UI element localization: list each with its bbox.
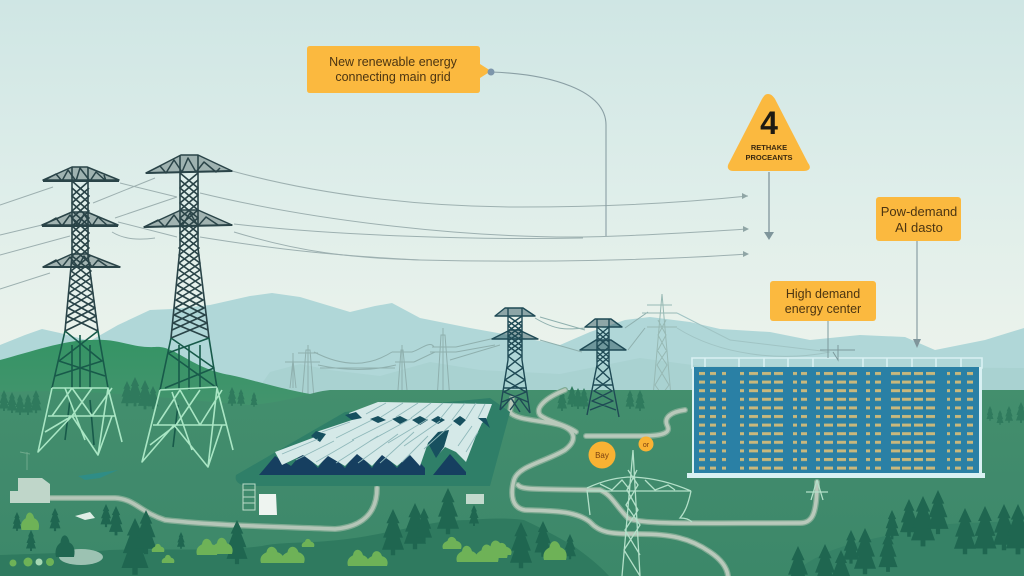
back tree line (0, 377, 1024, 425)
tower centre-left: pale base (142, 387, 233, 467)
white vehicle (75, 512, 95, 520)
distant pale pylons and wires (285, 312, 648, 400)
server rows (699, 371, 977, 474)
shed (466, 494, 484, 504)
data centre base (687, 473, 985, 478)
solar panel gaps (311, 412, 490, 458)
data centre (687, 320, 985, 478)
building (10, 478, 50, 503)
badge: small: or (643, 442, 650, 449)
warning triangle callout (728, 94, 810, 171)
data centre roof frame (692, 358, 982, 368)
wires (0, 171, 748, 289)
tower middle one (492, 308, 538, 413)
badge: bay (588, 442, 616, 468)
callout: new renewable energy: connecting main grid (335, 70, 451, 84)
callout: new renewable energy: New renewable energy (329, 55, 458, 69)
small aircraft (78, 470, 118, 480)
callout: power demand (876, 197, 961, 241)
warning triangle callout: RETHAKE (751, 143, 787, 152)
data centre frame (692, 367, 982, 473)
distant mountains (0, 293, 1024, 400)
tower middle two (580, 319, 626, 417)
small wind pylon (20, 452, 30, 470)
tower centre-left (142, 155, 233, 467)
warning triangle callout: 4 (760, 105, 778, 141)
connector from callout to wires (488, 68, 606, 236)
sky background (0, 0, 1024, 400)
tower centre-left: upper lattice (171, 155, 209, 338)
solar farm (236, 398, 510, 486)
tower centre-left: lower lattice (160, 338, 217, 447)
badge: bay: Bay (595, 451, 609, 460)
pond (59, 549, 103, 565)
bushes (10, 512, 567, 566)
tower centre-left: arms (144, 155, 232, 227)
callout: high demand: energy center (785, 302, 861, 316)
tower left: lower lattice (52, 331, 108, 445)
roads and pipelines (50, 390, 817, 576)
data centre blue panel (693, 367, 981, 473)
foreground trees (12, 488, 1024, 576)
tower left (38, 167, 122, 455)
small ground objects (10, 452, 484, 565)
solar panels: front and middle mass (275, 402, 492, 466)
callout: new renewable energy (307, 46, 491, 93)
scaffold (243, 484, 255, 510)
warning triangle callout: PROCEANTS (745, 153, 793, 162)
solar farm base (236, 398, 510, 486)
ground (0, 390, 1024, 576)
badge: small (638, 436, 654, 452)
wire arrowheads (742, 193, 749, 257)
solar panel supports (259, 450, 466, 475)
green hill (0, 340, 330, 420)
arrow from power demand callout (913, 241, 921, 348)
callout: high demand (770, 281, 876, 321)
solar panel dividers (282, 403, 485, 463)
pale foreground pylon (587, 450, 828, 576)
callout: power demand: AI dasto (895, 220, 943, 235)
arrow from triangle (764, 172, 774, 240)
tower left: upper lattice (65, 167, 98, 331)
truck (259, 494, 277, 515)
callout: high demand: High demand (786, 287, 860, 301)
lower dark hills (0, 518, 1024, 576)
tower left: arms (42, 167, 120, 267)
callout: power demand: Pow-demand (881, 204, 957, 219)
pale pylon right of centre (642, 294, 830, 408)
rooftop antenna (820, 320, 855, 360)
tower left: pale base (38, 388, 122, 455)
